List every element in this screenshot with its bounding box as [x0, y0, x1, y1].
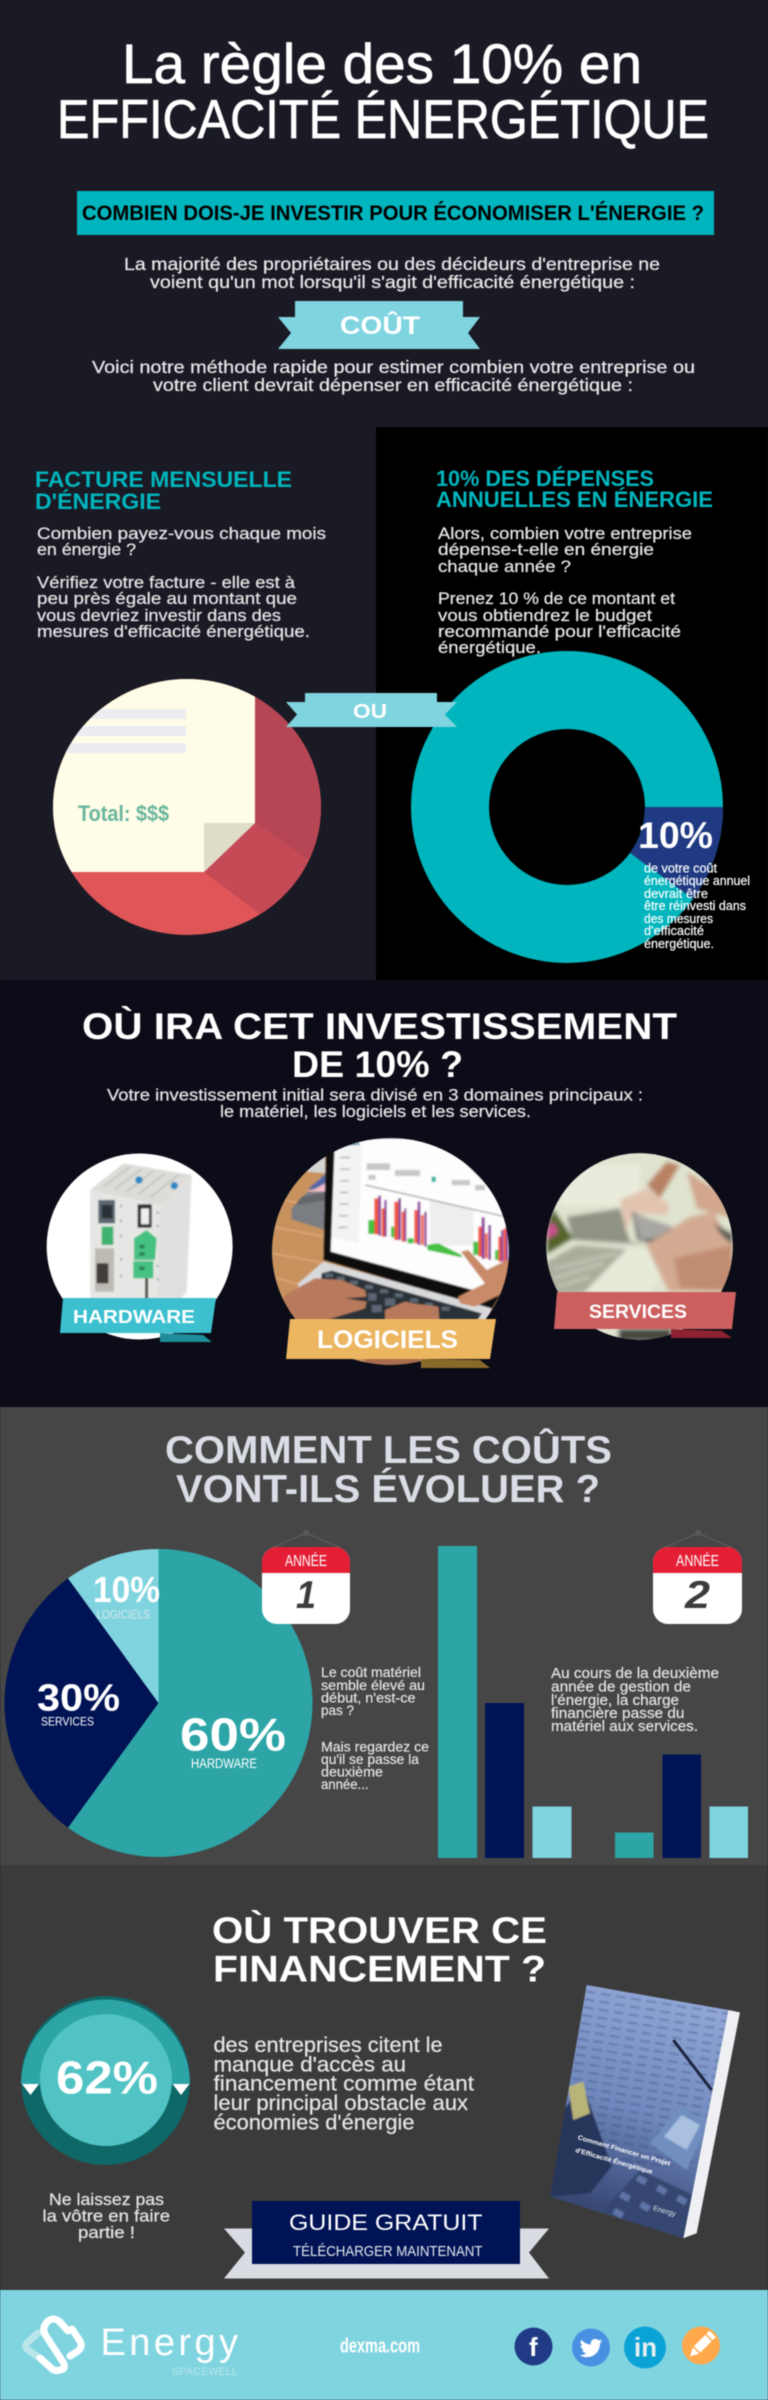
donut label: des mesures	[644, 911, 713, 926]
donut label: d'efficacité	[644, 923, 704, 938]
heading: monthly bill	[35, 467, 292, 514]
card: hardware	[46, 1152, 234, 1343]
photo: laptop with dashboard	[271, 1137, 510, 1366]
chart: year 2 bars	[615, 1754, 748, 1858]
text: year 1: qu'il se passe la	[321, 1751, 419, 1767]
method paragraph: votre client devrait dépenser en efficacité énergétique :	[153, 375, 633, 395]
ribbon: coût	[278, 301, 480, 349]
text: year 1: Le coût matériel	[321, 1664, 421, 1680]
text: do not be one of them	[42, 2190, 170, 2242]
question banner: COMBIEN DOIS-JE INVESTIR POUR ÉCONOMISER L'ÉNERGIE ?	[82, 202, 704, 225]
text: year 1: début, n'est-ce	[321, 1690, 416, 1706]
text: funding obstacle: manque d'accès au	[214, 2052, 406, 2076]
call to action	[224, 2201, 549, 2278]
card: software	[265, 1130, 515, 1375]
ribbon: ou: OU	[353, 701, 387, 723]
text: do not be one of them: la vôtre en faire	[42, 2206, 170, 2226]
photo: hands with phone and laptop	[545, 1152, 734, 1340]
heading	[212, 1909, 547, 1990]
pie label: services: 30%	[37, 1678, 120, 1720]
text: year 1: pas ?	[321, 1702, 354, 1718]
photo: hardware device	[46, 1152, 234, 1340]
text: annual spend: vous obtiendrez le budget	[438, 607, 652, 625]
donut label: 10%	[638, 815, 713, 856]
chart: energy bill pie with paper	[50, 675, 330, 940]
heading: monthly bill: D'ÉNERGIE	[35, 489, 161, 514]
book title: d'Efficacité Énergétique	[574, 2145, 654, 2176]
text: annual spend: énergétique.	[438, 639, 541, 657]
text: annual spend: dépense-t-elle en énergie	[438, 541, 654, 559]
donut label: énergétique.	[644, 936, 714, 951]
logo: Energy Spacewell: Energy	[100, 2322, 238, 2364]
icon: calendar year 2: ANNÉE	[676, 1551, 719, 1570]
heading	[82, 1005, 677, 1085]
ribbon: ou	[286, 693, 457, 727]
text: year 1: semble élevé au	[321, 1677, 425, 1693]
icon: calendar year 1: 1	[296, 1574, 316, 1617]
subheading: Votre investissement initial sera divisé en 3 domaines principaux :	[107, 1086, 643, 1104]
subheading	[107, 1086, 643, 1121]
text: annual spend: Alors, combien votre entreprise	[438, 525, 692, 543]
dashboard logo: DEXMA	[341, 1140, 360, 1147]
text: monthly bill: Combien payez-vous chaque mois	[37, 525, 326, 543]
panel: right black column	[376, 427, 768, 980]
icon: blog pencil	[682, 2326, 720, 2364]
question banner	[77, 191, 714, 235]
heading: FINANCEMENT ?	[213, 1948, 546, 1990]
icon: facebook: f	[529, 2332, 538, 2362]
ribbon: software	[286, 1319, 496, 1368]
total label: Total: $$$	[78, 801, 169, 826]
icon: twitter	[572, 2328, 610, 2366]
text: funding obstacle: leur principal obstacle aux	[214, 2091, 468, 2115]
heading: annual spend	[436, 466, 713, 512]
text: annual spend: chaque année ?	[438, 558, 571, 576]
heading: annual spend: ANNUELLES EN ÉNERGIE	[436, 487, 713, 512]
icon: linkedin	[624, 2326, 666, 2368]
ribbon: services: SERVICES	[589, 1302, 687, 1323]
icon: facebook	[514, 2328, 552, 2366]
heading: OÙ IRA CET INVESTISSEMENT	[82, 1005, 677, 1047]
chart: year 1 bars	[438, 1546, 572, 1858]
text: monthly bill: peu près égale au montant que	[37, 590, 297, 608]
text: do not be one of them: Ne laissez pas	[49, 2190, 164, 2209]
chart: 10 percent donut	[450, 690, 750, 951]
icon: calendar year 2: 2	[684, 1574, 710, 1617]
heading: monthly bill: FACTURE MENSUELLE	[35, 467, 292, 492]
chart: year 1 pie	[5, 1549, 313, 1857]
call to action: TÉLÉCHARGER MAINTENANT	[293, 2243, 482, 2260]
text: year 2: l'énergie, la charge	[551, 1692, 679, 1709]
heading: DE 10% ?	[292, 1044, 463, 1085]
text: annual spend	[438, 525, 692, 657]
ribbon: coût: COÛT	[340, 310, 420, 340]
method paragraph	[92, 357, 695, 395]
text: funding obstacle: des entreprises citent le	[214, 2033, 442, 2057]
website: dexma.com	[340, 2336, 420, 2358]
text: monthly bill	[37, 525, 326, 641]
text: monthly bill: Vérifiez votre facture - elle est à	[37, 574, 296, 592]
text: year 1	[321, 1664, 429, 1792]
intro paragraph: voient qu'un mot lorsqu'il s'agit d'efficacité énergétique :	[150, 272, 635, 292]
panel: footer	[0, 2290, 768, 2400]
pie label: hardware: HARDWARE	[191, 1755, 257, 1771]
text: annual spend: Prenez 10 % de ce montant et	[438, 590, 675, 608]
text: monthly bill: en énergie ?	[37, 541, 136, 559]
subheading: le matériel, les logiciels et les services.	[220, 1102, 531, 1121]
text: year 2: année de gestion de	[551, 1678, 691, 1696]
heading: OÙ TROUVER CE	[212, 1909, 547, 1951]
title	[57, 32, 709, 150]
call to action: GUIDE GRATUIT	[289, 2210, 482, 2235]
text: year 1: année...	[321, 1776, 368, 1792]
logo: Energy Spacewell: SPACEWELL	[172, 2366, 238, 2378]
pie label: services: SERVICES	[41, 1714, 94, 1728]
donut label: devrait être	[644, 886, 708, 901]
title: La règle des 10% en	[122, 32, 642, 95]
text: funding obstacle: financement comme étant	[214, 2072, 474, 2096]
donut label	[638, 815, 750, 951]
text: year 2: matériel aux services.	[551, 1718, 698, 1735]
stat: 62 percent	[21, 1996, 190, 2165]
pie label: hardware: 60%	[180, 1708, 286, 1760]
text: monthly bill: mesures d'efficacité énergétique.	[37, 623, 310, 641]
text: monthly bill: vous devriez investir dans des	[37, 607, 281, 625]
donut label: de votre coût	[644, 860, 717, 876]
pie label: software: LOGICIELS	[96, 1608, 150, 1622]
card: services	[545, 1152, 737, 1340]
intro paragraph: La majorité des propriétaires ou des décideurs d'entreprise ne	[124, 254, 660, 274]
text: year 2: Au cours de la deuxième	[551, 1665, 719, 1682]
heading: annual spend: 10% DES DÉPENSES	[436, 466, 654, 491]
pie label: software: 10%	[93, 1569, 160, 1610]
text: do not be one of them: partie !	[78, 2223, 135, 2242]
text: year 1: deuxième	[321, 1764, 383, 1780]
text: funding obstacle	[214, 2033, 474, 2134]
ribbon: services	[554, 1292, 736, 1338]
donut label: énergétique annuel	[644, 873, 750, 888]
logo: Energy Spacewell	[26, 2319, 238, 2378]
icon: calendar year 1	[262, 1530, 350, 1624]
panel: where the investment goes	[0, 980, 768, 1407]
text: year 2: financière passe du	[551, 1705, 684, 1722]
text: annual spend: recommandé pour l'efficacité	[438, 623, 681, 641]
book brand: Energy	[652, 2203, 677, 2218]
text: year 2	[551, 1665, 719, 1735]
book title: Comment Financer un Projet	[577, 2135, 672, 2168]
panel: where to find funding	[0, 1865, 768, 2290]
panel: intro	[0, 0, 768, 980]
text: funding obstacle: économies d'énergie	[214, 2110, 414, 2134]
ribbon: hardware: HARDWARE	[73, 1307, 195, 1327]
illustration: guide book	[550, 1984, 740, 2239]
text: year 1: Mais regardez ce	[321, 1738, 429, 1754]
icon: linkedin: in	[634, 2332, 657, 2362]
icon: calendar year 2	[653, 1530, 742, 1624]
ribbon: software: LOGICIELS	[317, 1326, 458, 1354]
intro paragraph	[124, 254, 660, 292]
heading	[165, 1427, 612, 1511]
stat: 62 percent: 62%	[56, 2052, 158, 2104]
ribbon: hardware	[60, 1298, 216, 1342]
heading: VONT-ILS ÉVOLUER ?	[176, 1467, 600, 1511]
method paragraph: Voici notre méthode rapide pour estimer combien votre entreprise ou	[92, 357, 695, 377]
icon: calendar year 1: ANNÉE	[285, 1551, 327, 1570]
heading: COMMENT LES COÛTS	[165, 1427, 612, 1472]
panel: how costs evolve	[0, 1407, 768, 1865]
donut label: être réinvesti dans	[644, 898, 746, 913]
